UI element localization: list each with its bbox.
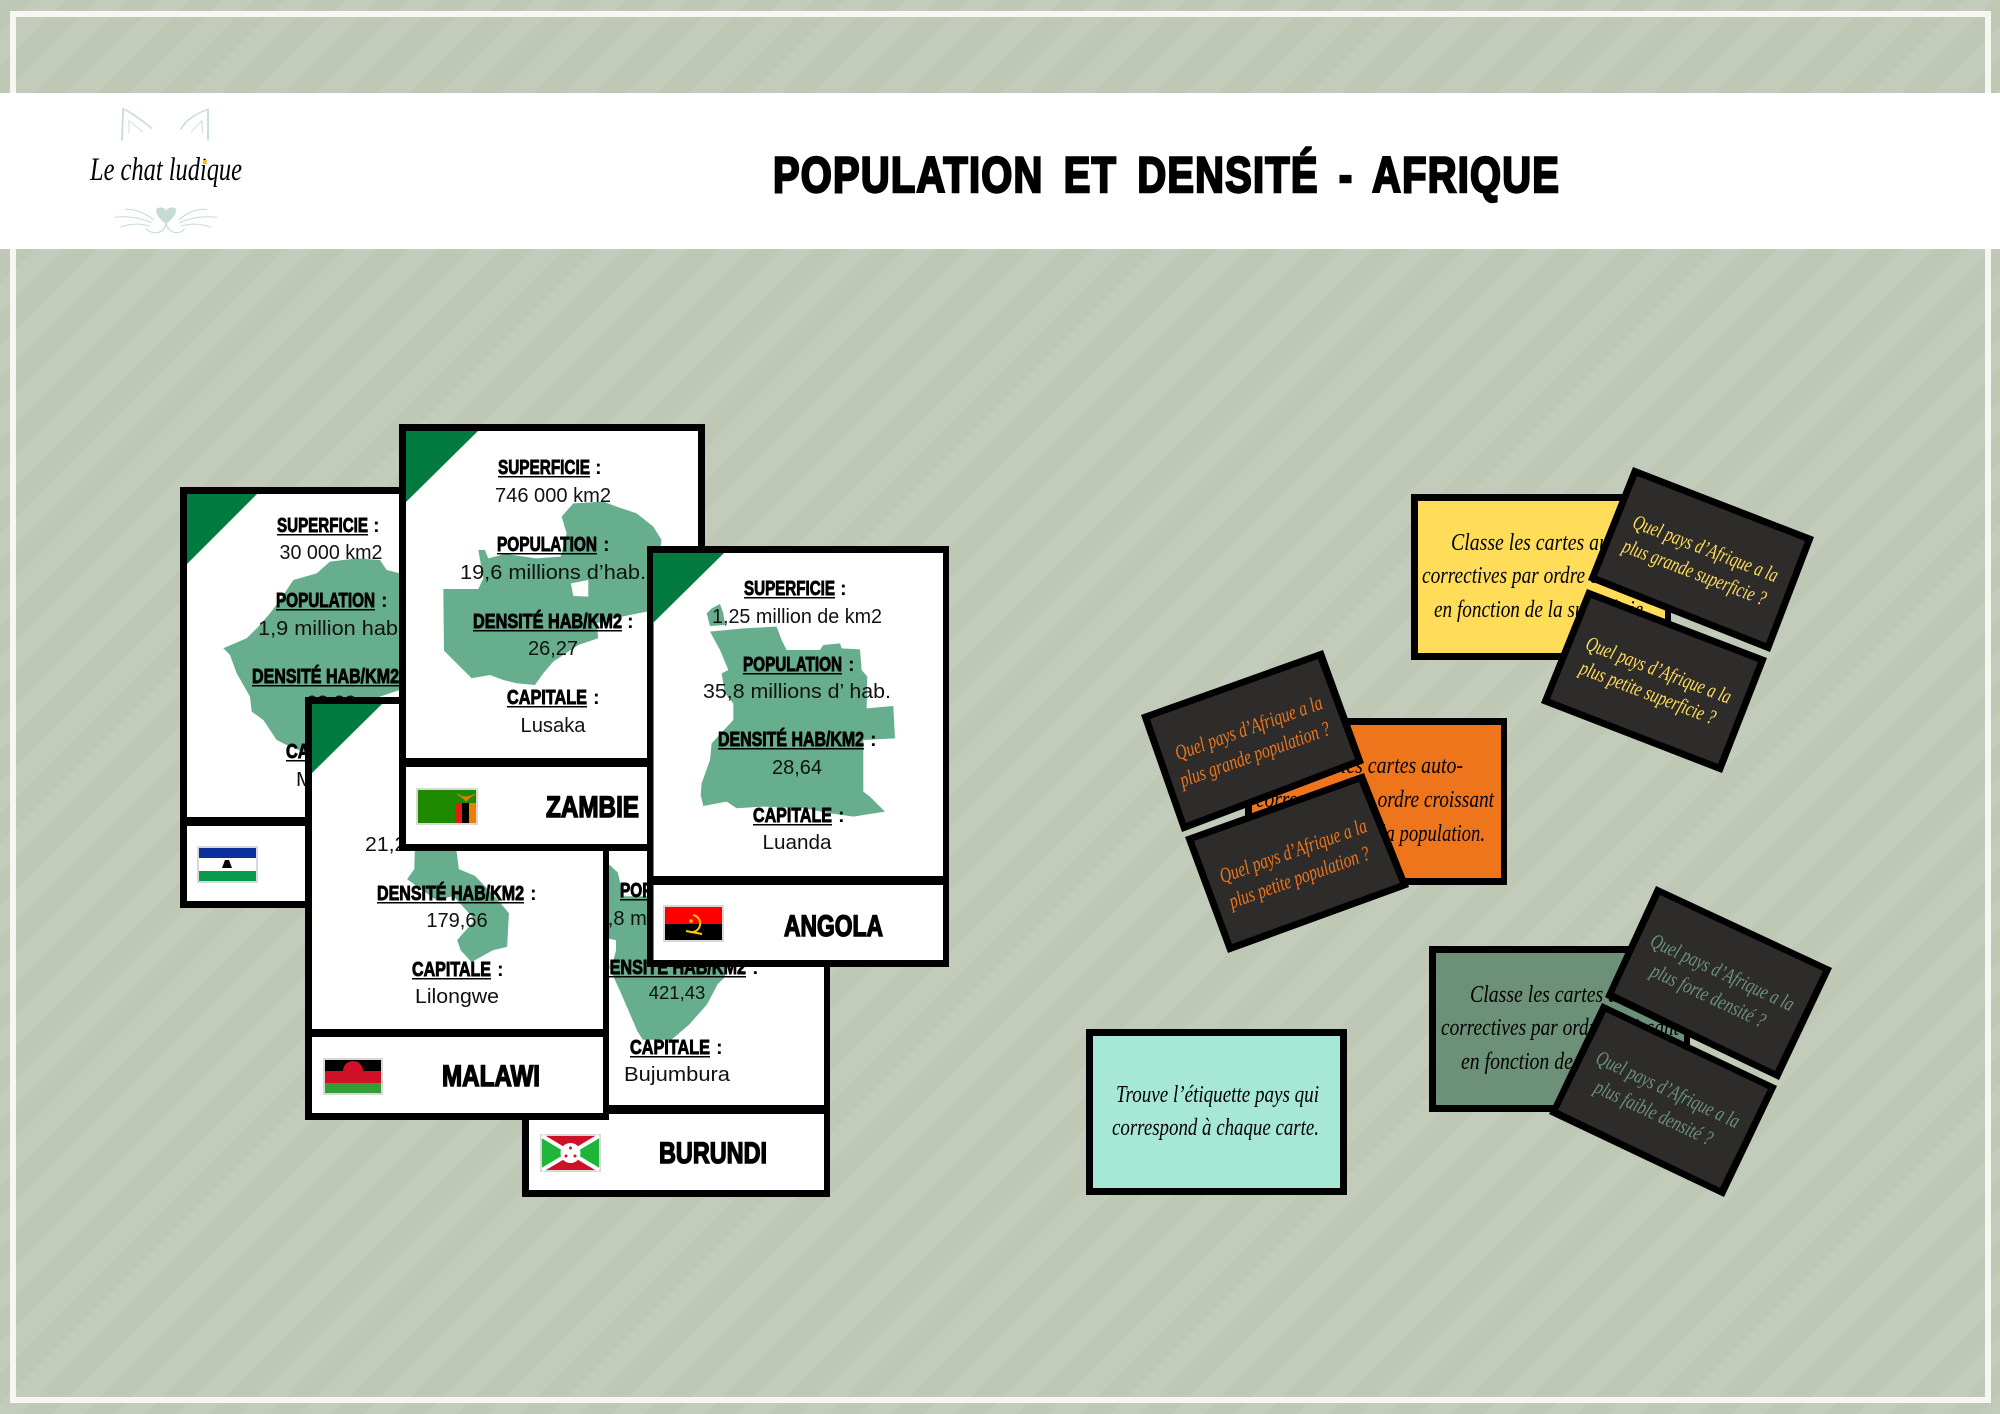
text: population: : — [381, 590, 388, 612]
text: capitale: CAPITALE — [286, 741, 366, 763]
text: capitale: : — [716, 1037, 723, 1059]
instruction card: densité (green): Classe les cartes auto- — [1470, 982, 1650, 1008]
card: Lesotho — [180, 487, 484, 908]
instruction card: population (orange) — [1245, 718, 1507, 885]
question card: plus grande superficie — [1588, 467, 1814, 652]
text: superficie — [277, 515, 382, 564]
question card: plus petite population: plus petite population ? — [1224, 841, 1373, 914]
corner triangle — [653, 553, 724, 623]
text: superficie: SUPERFICIE — [402, 729, 494, 751]
flag: Zambie — [416, 788, 478, 825]
text: population: POPULATION — [276, 590, 375, 612]
logo wordmark: Le chat ludique — [89, 152, 242, 188]
text: capitale: Lilongwe — [415, 986, 499, 1008]
text: densité — [718, 728, 877, 779]
question card: plus petite superficie — [1541, 589, 1767, 773]
text: population — [587, 880, 757, 930]
text: superficie — [495, 457, 611, 507]
text: capitale — [507, 687, 600, 737]
logo: Le chat ludique — [89, 109, 242, 233]
text: densité: : — [530, 883, 537, 905]
question card: plus grande population: Quel pays d’Afrique a la — [1171, 690, 1326, 765]
text: population: POPULATION — [400, 806, 500, 828]
text: population: POPULATION — [497, 534, 597, 556]
text: densité — [598, 956, 759, 1003]
card: Zambie — [399, 424, 705, 851]
header band — [0, 93, 2000, 249]
map: Angola — [701, 604, 895, 817]
text: superficie: : — [499, 729, 506, 751]
instruction card: étiquette (mint) — [1086, 1029, 1347, 1195]
country name: BURUNDI — [659, 1137, 767, 1170]
country name: ANGOLA — [784, 910, 883, 943]
text: population: POPULATION — [743, 654, 842, 676]
country name: LESOTHO — [345, 860, 465, 893]
corner triangle — [312, 704, 382, 773]
question card: plus petite superficie: Quel pays d’Afrique a la — [1583, 631, 1735, 709]
instruction card: population (orange): correctives par ordre croissant — [1256, 787, 1495, 813]
question card: plus petite population — [1185, 773, 1409, 953]
text: densité: : — [627, 611, 634, 633]
text: densité: : — [870, 729, 877, 751]
text: population: : — [507, 806, 514, 828]
instruction card: superficie (yellow): Classe les cartes auto- — [1451, 530, 1631, 556]
text: capitale: : — [593, 687, 600, 709]
text: superficie: 118 000 km2 — [400, 757, 514, 779]
text: densité: DENSITÉ HAB/KM2 — [718, 728, 864, 751]
text: population — [703, 654, 891, 703]
text: densité: : — [406, 666, 413, 688]
text: superficie: : — [373, 515, 380, 537]
text: densité: DENSITÉ HAB/KM2 — [598, 956, 746, 979]
text: densité: DENSITÉ HAB/KM2 — [473, 610, 622, 633]
map: Lesotho — [223, 558, 427, 753]
text: population: 1,9 million hab. — [258, 618, 404, 640]
instruction card: densité (green) — [1429, 946, 1690, 1112]
card: Burundi — [522, 776, 830, 1197]
text: capitale: : — [372, 741, 379, 763]
question card: plus grande superficie: Quel pays d’Afrique a la — [1630, 509, 1782, 587]
instruction card: population (orange): en fonction de la population. — [1270, 821, 1485, 847]
text: capitale — [624, 1037, 731, 1086]
question card: plus grande population: plus grande population ? — [1175, 716, 1333, 792]
instruction card: étiquette (mint): correspond à chaque carte. — [1112, 1115, 1319, 1141]
text: superficie: : — [595, 457, 602, 479]
text: superficie: SUPERFICIE — [744, 578, 835, 600]
text: densité — [252, 665, 413, 714]
instruction card: superficie (yellow): correctives par ordre croissant — [1422, 563, 1661, 589]
question card: plus faible densité — [1549, 1003, 1777, 1197]
question card: plus faible densité: plus faible densité ? — [1589, 1074, 1717, 1150]
text: superficie: 746 000 km2 — [495, 485, 611, 507]
text: capitale: CAPITALE — [507, 687, 587, 709]
flag: Angola — [663, 905, 724, 942]
flag: Burundi — [540, 1134, 601, 1172]
question card: plus grande population — [1141, 650, 1364, 832]
text: capitale: CAPITALE — [753, 805, 832, 827]
map: Zambie — [443, 502, 662, 685]
text: capitale — [286, 741, 379, 791]
instruction card: densité (green): en fonction de la densité. — [1461, 1049, 1659, 1075]
question card: plus forte densité — [1605, 886, 1832, 1080]
text: population: 19,6 millions d’hab. — [460, 562, 646, 584]
question card: plus forte densité: plus forte densité ? — [1646, 958, 1770, 1033]
text: superficie: SUPERFICIE — [498, 457, 590, 479]
text: population: : — [727, 880, 734, 902]
text: densité: 28,64 — [772, 757, 822, 779]
text: superficie: : — [840, 578, 847, 600]
text: superficie: 30 000 km2 — [280, 542, 382, 564]
text: densité — [473, 610, 634, 660]
text: population — [365, 806, 547, 856]
text: capitale: Lusaka — [520, 715, 586, 737]
text: densité — [377, 882, 537, 932]
instruction card: superficie (yellow) — [1411, 494, 1671, 660]
icon: cat ears — [122, 109, 208, 141]
question card: plus faible densité: Quel pays d’Afrique a la — [1592, 1045, 1744, 1133]
text: population — [460, 534, 646, 584]
question card: plus petite population: Quel pays d’Afrique a la — [1216, 813, 1370, 888]
map: Burundi — [600, 864, 725, 1040]
map: Malawi — [407, 842, 509, 962]
text: population: : — [848, 654, 855, 676]
text: population: 35,8 millions d’ hab. — [703, 681, 891, 703]
text: superficie: SUPERFICIE — [277, 515, 368, 537]
text: capitale: CAPITALE — [630, 1037, 710, 1059]
text: capitale: : — [497, 959, 504, 981]
country name: ZAMBIE — [546, 791, 639, 824]
icon: yellow dot — [203, 160, 207, 164]
card: Malawi — [305, 697, 609, 1120]
text: capitale: : — [838, 805, 845, 827]
instruction card: densité (green): correctives par ordre croissant — [1441, 1015, 1680, 1041]
text: population — [258, 590, 404, 640]
text: superficie: 1,25 million de km2 — [712, 606, 882, 628]
text: capitale — [412, 959, 504, 1008]
card: Angola — [647, 546, 949, 967]
text: densité: DENSITÉ HAB/KM2 — [252, 665, 399, 688]
title: POPULATION ET DENSITÉ - AFRIQUE — [773, 147, 1560, 203]
corner triangle — [529, 783, 599, 853]
question card: plus forte densité: Quel pays d’Afrique a la — [1647, 928, 1798, 1016]
text: population: POPULATION — [620, 880, 720, 902]
text: capitale: Bujumbura — [624, 1064, 731, 1086]
text: capitale — [753, 805, 845, 854]
text: densité: : — [752, 957, 759, 979]
country name: MALAWI — [442, 1060, 540, 1093]
instruction card: étiquette (mint): Trouve l’étiquette pays qui — [1116, 1082, 1319, 1108]
flag: Lesotho — [197, 846, 258, 883]
question card: plus grande superficie: plus grande superficie ? — [1618, 533, 1770, 610]
question card: plus petite superficie: plus petite superficie ? — [1575, 655, 1720, 730]
text: densité: DENSITÉ HAB/KM2 — [377, 882, 524, 905]
instruction card: population (orange): Classe les cartes auto- — [1283, 753, 1463, 779]
text: superficie — [400, 729, 514, 779]
icon: cat nose and whiskers — [114, 207, 217, 233]
text: superficie: 28 000 km2 — [625, 833, 729, 855]
text: population: 11,8 millions d’hab. — [587, 908, 757, 930]
flag: Malawi — [323, 1058, 383, 1095]
corner triangle — [406, 431, 478, 502]
text: capitale: CAPITALE — [412, 959, 491, 981]
text: population: : — [603, 534, 610, 556]
text: population: 21,2 millions d’hab. — [365, 834, 547, 856]
text: superficie — [712, 578, 882, 628]
text: superficie: SUPERFICIE — [622, 805, 714, 827]
text: densité: 63,33 — [306, 692, 356, 714]
text: superficie: : — [719, 805, 726, 827]
text: densité: 179,66 — [426, 910, 488, 932]
text: capitale: Maseru — [296, 769, 366, 791]
text: densité: 421,43 — [649, 982, 705, 1003]
corner triangle — [187, 494, 257, 564]
text: superficie — [622, 805, 729, 855]
instruction card: superficie (yellow): en fonction de la superficie. — [1434, 597, 1648, 623]
text: densité: 26,27 — [528, 638, 578, 660]
text: capitale: Luanda — [762, 832, 832, 854]
